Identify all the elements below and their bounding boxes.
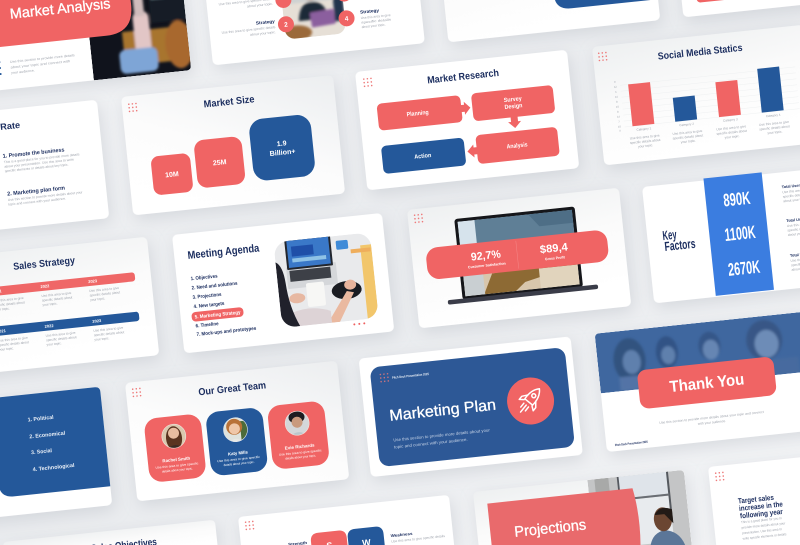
bar chart: 4	[615, 90, 617, 94]
description: This is a good place for you to	[741, 516, 782, 524]
bar captions: your topic.	[681, 139, 696, 144]
card: Katy Mills: Use this area to give specific	[217, 455, 261, 463]
item 1: specific elements or details about key topic.	[5, 163, 69, 173]
description: about your topic and connect with	[10, 59, 71, 69]
title: Projections	[514, 516, 587, 541]
slide: Target sales	[708, 445, 800, 545]
item 2	[7, 184, 84, 207]
laptop mockup	[439, 205, 598, 305]
right strategy text: Use this area to give	[361, 13, 391, 20]
list	[27, 413, 75, 473]
red title block	[487, 488, 642, 545]
blue metrics panel	[703, 172, 774, 296]
step: planning: Planning	[406, 110, 429, 118]
title: Marketing Plan	[389, 397, 497, 425]
list: 2. Economical	[29, 431, 66, 440]
blue metrics panel: 1100K	[724, 222, 757, 245]
bar captions: Use this area to give	[672, 129, 703, 136]
red timeline: your topic.	[42, 301, 58, 307]
description: topic and connect with your audience.	[394, 437, 468, 449]
list: 3. Social	[31, 448, 53, 456]
arrow: planning to survey	[459, 101, 471, 115]
block 1.9 Billion+: 1.9	[277, 140, 287, 148]
item 1: 1. Promote the business	[2, 147, 65, 160]
blue timeline: specific details about	[46, 335, 77, 342]
description: write specific elements or details	[742, 532, 787, 541]
blue panel	[370, 347, 575, 467]
red timeline: your topic.	[90, 296, 106, 302]
red pill with heading: Thank You	[669, 371, 745, 396]
bar chart: 8	[616, 100, 618, 104]
bullet dots	[0, 61, 2, 75]
step: planning	[376, 95, 463, 131]
step: analysis	[475, 127, 560, 164]
title: Rate	[0, 120, 21, 132]
step circles	[275, 0, 355, 33]
red timeline: specific details about	[89, 290, 120, 298]
red pill with heading	[637, 356, 777, 409]
slide: Meeting Agenda	[172, 213, 394, 353]
slide: Rate	[0, 100, 109, 240]
step: survey design	[471, 85, 555, 121]
bar captions: Use this area to give	[759, 120, 789, 127]
arrow: analysis to action	[467, 144, 480, 158]
heading: Target sales	[738, 493, 774, 506]
title: Social Media Statics	[657, 43, 743, 63]
bar captions: specific details about	[716, 129, 747, 136]
red block	[695, 0, 737, 3]
slide: Sales Objectives	[3, 520, 218, 545]
bar chart: 10	[616, 104, 620, 109]
blue metrics panel: 890K	[722, 188, 751, 211]
step: action	[381, 138, 466, 174]
KPI: customer satisfaction	[466, 248, 506, 269]
card: Rachel Smith	[143, 413, 207, 483]
description: Use this section to provide more details about your	[393, 427, 491, 443]
metric descriptions	[782, 182, 800, 272]
heading: Key	[662, 227, 678, 243]
step circles: 4	[344, 16, 349, 23]
card: Evie Richards	[267, 400, 330, 470]
blue timeline: 2022	[44, 323, 55, 329]
step circles: 2	[284, 21, 289, 29]
arrow: survey to analysis	[507, 115, 522, 129]
slide: Market Analysis	[0, 0, 196, 93]
item 2: topic and connect with your audience.	[8, 197, 66, 207]
blue block	[552, 0, 659, 10]
slide: Our Great Team	[125, 361, 349, 501]
description: with your audience.	[698, 419, 726, 426]
bar captions: Use this area to give	[716, 124, 747, 131]
bar chart: 0	[614, 80, 616, 84]
bar chart: Category 2	[679, 122, 694, 127]
block 25M	[193, 136, 246, 189]
bar captions: specific details about	[672, 133, 703, 141]
card: Evie Richards: Use this area to give specific	[279, 448, 322, 457]
card: Rachel Smith: Use this area to give specific	[155, 461, 199, 470]
title: Sales Strategy	[13, 255, 76, 273]
left strategy text: about your topic.	[247, 2, 273, 8]
description: presentation. Use this area to	[742, 527, 782, 535]
weakness text: Weakness	[390, 531, 414, 538]
right strategy text: about your topic.	[361, 23, 386, 29]
red timeline: specific details about	[42, 295, 73, 303]
agenda list: 1. Objectives	[190, 273, 218, 282]
right strategy text: specific details	[361, 17, 392, 25]
slide: Key Factors	[642, 163, 800, 303]
slide: Social Media Statics	[592, 25, 800, 165]
blue team photo	[595, 311, 800, 393]
red timeline: 2022	[40, 283, 50, 289]
bar captions	[629, 120, 790, 150]
card: Rachel Smith: details about your topic.	[162, 466, 193, 474]
pagination dots	[353, 322, 365, 326]
right strategy text: Strategy	[360, 8, 380, 15]
bar chart: 14	[615, 95, 619, 99]
deck label: Pitch Deck Presentation 2025	[615, 440, 648, 447]
slide: Projections	[473, 470, 692, 545]
heading: Factors	[664, 236, 696, 254]
step: survey design: Design	[504, 103, 523, 111]
bar chart	[613, 61, 800, 134]
red timeline	[0, 272, 137, 316]
list: 1. Political	[27, 415, 54, 423]
bar captions: Use this area to give	[630, 133, 660, 141]
block 1.9 Billion+	[248, 114, 316, 182]
slide: top right	[671, 0, 800, 17]
blue timeline: specific details about	[94, 330, 125, 337]
slide: Laptop KPIs	[407, 188, 631, 328]
deck label: Pitch Deck Presentation 2025	[392, 372, 429, 380]
left strategy text: about your topic.	[250, 30, 276, 37]
KPI: customer satisfaction: Customer Satisfaction	[468, 261, 506, 269]
card: Evie Richards: Evie Richards	[284, 442, 315, 451]
bar chart: Category 4	[766, 113, 781, 118]
description	[659, 410, 765, 430]
bar captions: specific details about	[759, 124, 790, 131]
description	[741, 516, 788, 541]
agenda list: 2. Need and solutions	[191, 281, 238, 292]
KPI: gross profit	[539, 241, 570, 262]
KPI pill	[425, 229, 609, 280]
step: action: Action	[414, 153, 432, 161]
title: Our Great Team	[198, 380, 267, 398]
slide: Market Size	[121, 75, 345, 215]
item 1: This is a good place for you to provide more details	[4, 152, 80, 164]
card: Katy Mills: details about your topic.	[223, 460, 255, 467]
bar chart: Category 3	[723, 117, 738, 123]
slide: Sales Strategy	[0, 237, 159, 377]
bar chart: 4	[619, 128, 621, 133]
block 10M: 10M	[165, 171, 179, 179]
bar captions: your topic.	[767, 130, 783, 135]
agenda list: 7. Mock-ups and prototypes	[196, 326, 257, 338]
bar chart: 7	[618, 119, 620, 124]
red timeline: Use this area to give	[89, 286, 119, 293]
bar captions: specific details about	[630, 138, 661, 145]
block W	[347, 526, 385, 545]
card: Katy Mills	[205, 407, 268, 476]
bar captions: your topic.	[724, 134, 740, 140]
title: Market Research	[427, 68, 500, 86]
left strategy text: Strategy	[256, 19, 276, 26]
heading: following year	[740, 507, 783, 520]
red title block	[0, 0, 134, 51]
heading	[738, 492, 784, 520]
slide: PEST list	[0, 387, 112, 527]
blue timeline: Use this area to give	[93, 326, 124, 333]
photo: woman at laptop	[273, 229, 379, 328]
description: Use this section to provide more details	[10, 53, 75, 64]
item 2: 2. Marketing plan form	[7, 186, 65, 198]
list: 4. Technological	[32, 463, 75, 473]
item 2: Use this section to provide more details about your	[8, 190, 84, 202]
weakness text	[390, 527, 445, 544]
slide: Thank You	[595, 311, 800, 452]
photo: man by the window	[587, 470, 692, 545]
title: Market Size	[203, 94, 255, 111]
left strategy text: Use this area to give specific details	[221, 25, 276, 35]
description: provide more details about your	[741, 521, 786, 530]
KPI: customer satisfaction: 92,7%	[470, 248, 502, 264]
bar captions: your topic.	[638, 143, 653, 149]
bar chart: Category 1	[636, 126, 652, 132]
blue timeline: your topic.	[46, 341, 62, 347]
blue timeline	[0, 312, 141, 356]
block 10M	[150, 153, 194, 196]
bar chart: 14	[617, 114, 621, 119]
icon: rocket	[505, 375, 556, 427]
left strategy text	[218, 0, 277, 40]
agenda list	[187, 270, 257, 338]
bar chart: 12	[614, 85, 617, 89]
block 25M: 25M	[213, 159, 227, 167]
description	[393, 427, 491, 449]
photo: people at a table	[89, 0, 191, 80]
bar chart: 8	[617, 110, 619, 114]
block 1.9 Billion+: Billion+	[269, 148, 296, 158]
card: Rachel Smith: Rachel Smith	[162, 456, 191, 464]
KPI: gross profit: Gross Profit	[545, 255, 566, 261]
title: Meeting Agenda	[187, 242, 261, 262]
description: Use this section to provide more details about your topic and connect	[659, 410, 764, 425]
heading	[662, 225, 696, 254]
slide: Marketing Plan cover	[359, 336, 583, 477]
step: survey design: Survey	[504, 96, 523, 104]
description: your audience.	[11, 68, 35, 75]
agenda list: 6. Timeline	[195, 321, 219, 330]
right strategy text	[360, 7, 392, 29]
red timeline: Use this area to give	[41, 291, 72, 298]
agenda list: 4. New targets	[193, 301, 225, 310]
weakness text: Use this area to give specific details	[391, 534, 445, 544]
blue timeline: 2023	[92, 318, 102, 324]
block S	[310, 530, 348, 545]
item 1	[2, 146, 81, 173]
blue metrics panel: 2670K	[727, 257, 761, 280]
description	[10, 53, 76, 75]
agenda list: 3. Projections	[192, 292, 222, 301]
blue panel	[0, 387, 110, 498]
step: analysis: Analysis	[506, 142, 528, 151]
bar chart: 10	[618, 124, 622, 129]
slide: Market Research	[355, 50, 579, 190]
card: Katy Mills: Katy Mills	[228, 449, 249, 457]
slide: Strategy	[201, 0, 425, 65]
heading: increase in the	[739, 499, 783, 513]
blue timeline: your topic.	[94, 336, 110, 342]
red timeline: 2023	[88, 278, 98, 284]
agenda list: 5. Marketing Strategy	[194, 310, 241, 321]
slide: top centre with blue shape	[436, 0, 661, 42]
item 1: about your presentation. Use this area to write	[4, 157, 74, 169]
slide: SWOT	[238, 495, 454, 545]
photo: woman with laptop	[282, 0, 346, 39]
KPI: gross profit: $89,4	[539, 241, 569, 256]
card: Evie Richards: details about your topic.	[285, 453, 316, 461]
blue timeline: Use this area to give	[45, 331, 76, 338]
